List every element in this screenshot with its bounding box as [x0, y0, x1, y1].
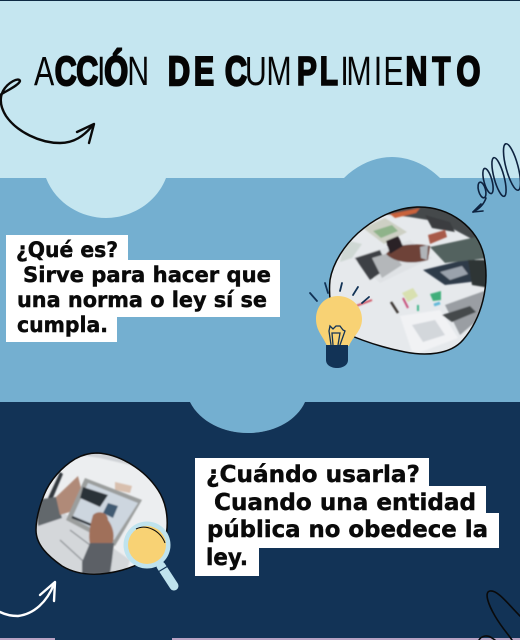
- photo: hands on magazines: [325, 205, 490, 357]
- title: N: [127, 47, 149, 94]
- decoration: bottom right scribble: [479, 591, 520, 640]
- icon: magnifying glass: [124, 522, 174, 586]
- title: C: [225, 47, 247, 94]
- photo: hands on tablet: [34, 451, 170, 576]
- panel: que es band: [0, 157, 520, 433]
- title: Ó: [104, 46, 128, 94]
- title: P: [297, 47, 317, 94]
- panel: cuando usarla band: [0, 402, 520, 640]
- text block: que es: cumpla.: [17, 313, 108, 337]
- text block: que es: [6, 235, 280, 342]
- title: E: [194, 47, 214, 94]
- title: O: [457, 47, 480, 94]
- text block: cuando usarla: ley.: [206, 545, 248, 571]
- title: C: [55, 47, 77, 94]
- arrow: bottom left white curve: [0, 582, 55, 616]
- text block: que es: Sirve para hacer que: [23, 263, 271, 287]
- bottom strip: [0, 638, 520, 640]
- text block: cuando usarla: pública no obedece la: [207, 517, 488, 543]
- title: U: [245, 47, 267, 94]
- text block: que es: ¿Qué es?: [16, 238, 118, 262]
- panel: title band: [0, 0, 520, 178]
- title: M: [346, 47, 372, 94]
- title: L: [320, 47, 338, 94]
- title: I: [97, 47, 105, 94]
- icon: light bulb: [310, 283, 369, 368]
- text block: que es: una norma o ley sí se: [17, 288, 267, 312]
- text block: cuando usarla: [195, 458, 499, 576]
- title: M: [266, 47, 292, 94]
- title: A: [34, 47, 54, 94]
- arrow: spiral: [473, 142, 520, 212]
- title: C: [76, 47, 98, 94]
- title: T: [432, 47, 451, 94]
- title: I: [340, 47, 349, 94]
- text block: cuando usarla: Cuando una entidad: [214, 490, 476, 516]
- title: D: [168, 47, 190, 94]
- title: I: [374, 47, 382, 94]
- text block: cuando usarla: ¿Cuándo usarla?: [206, 462, 420, 488]
- title: E: [383, 47, 404, 94]
- arrow: top left curl: [0, 80, 94, 143]
- title: N: [406, 47, 427, 94]
